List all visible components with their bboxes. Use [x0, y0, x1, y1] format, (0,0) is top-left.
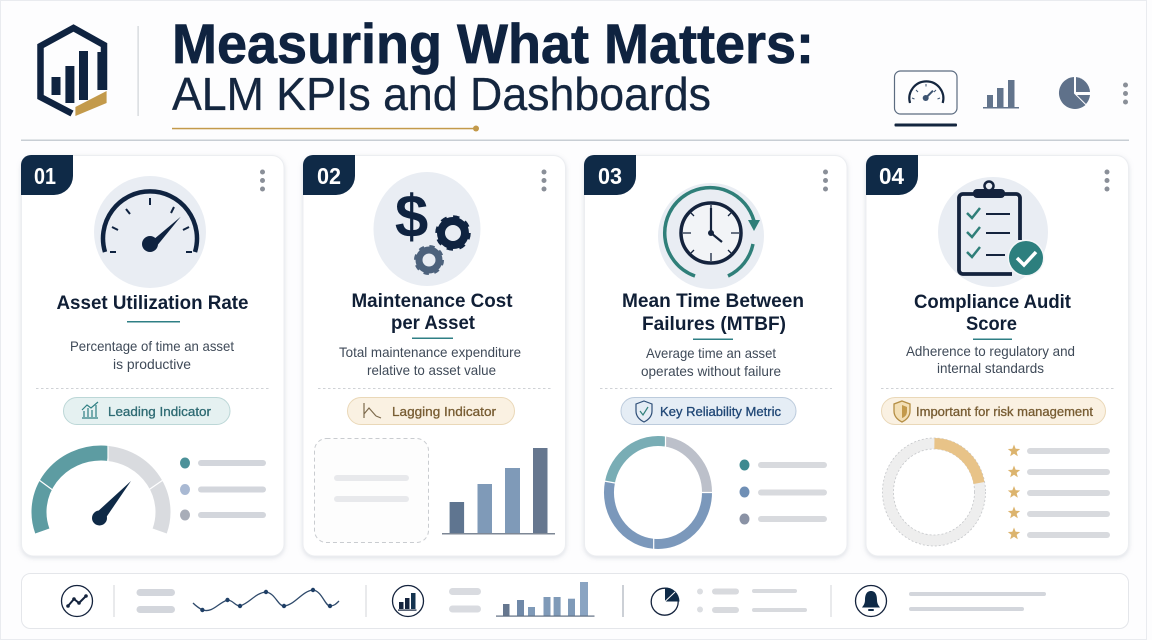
number badge 01	[21, 155, 73, 195]
chart: gauge	[39, 444, 163, 531]
heading: per Asset	[391, 312, 475, 334]
panel: card 01 asset utilization rate	[21, 155, 284, 556]
chart: score donut	[882, 438, 986, 546]
number badge 02: 02	[317, 163, 341, 189]
tag: key reliability metric: Key Reliability Metric	[660, 404, 781, 419]
description	[641, 345, 781, 379]
heading: Asset Utilization Rate	[56, 292, 249, 314]
gold title underline	[172, 126, 479, 132]
description	[339, 344, 521, 378]
number badge 03: 03	[598, 163, 622, 189]
description: is productive	[113, 356, 191, 372]
more menu	[1104, 170, 1110, 192]
chart: donut	[604, 436, 713, 550]
heading	[914, 291, 1071, 335]
heading: Compliance Audit	[914, 291, 1071, 313]
placeholder box	[314, 438, 428, 542]
description: operates without failure	[641, 363, 781, 379]
tag: key reliability metric	[621, 398, 796, 424]
icon: bell	[856, 586, 886, 616]
chart legend	[740, 460, 827, 524]
description: Total maintenance expenditure	[339, 344, 521, 360]
header logo	[40, 28, 107, 116]
description: Average time an asset	[646, 345, 776, 361]
tag: leading indicator	[64, 398, 230, 424]
number badge 03	[584, 155, 636, 195]
icon: dollar and gears: $	[395, 183, 428, 250]
panel: card 03 mean time between failures	[584, 155, 847, 556]
panel: card 04 compliance audit score	[866, 155, 1128, 556]
view switch: gauge icon selected	[894, 71, 957, 126]
heading	[352, 290, 513, 334]
chart legend	[180, 458, 266, 520]
mini bar chart	[496, 582, 594, 617]
description: Percentage of time an asset	[70, 338, 234, 354]
view switch: more menu	[1123, 82, 1128, 104]
heading: Mean Time Between	[622, 290, 804, 312]
panel: bottom summary strip	[22, 574, 1128, 628]
number badge 04	[866, 155, 918, 195]
heading: Maintenance Cost	[352, 290, 513, 312]
number badge 01: 01	[34, 163, 56, 189]
description: relative to asset value	[367, 362, 496, 378]
number badge 04: 04	[879, 163, 904, 189]
tag: important for risk management: Important for risk management	[916, 404, 1093, 419]
placeholder text lines	[909, 592, 1046, 611]
icon: bar chart	[392, 586, 424, 616]
more menu	[823, 170, 828, 192]
more menu	[542, 170, 546, 192]
sparkline	[193, 588, 339, 612]
view switch: pie chart icon	[1059, 77, 1090, 109]
title: Measuring What Matters:	[172, 12, 814, 75]
description: Adherence to regulatory and	[906, 343, 1075, 359]
icon: pie chart	[651, 587, 680, 615]
placeholder legend	[697, 588, 807, 613]
tag: lagging indicator	[348, 398, 514, 424]
description	[906, 343, 1075, 376]
icon: dollar and gears	[374, 172, 480, 286]
tag: lagging indicator: Lagging Indicator	[392, 404, 497, 419]
panel: card 02 maintenance cost per asset	[303, 155, 566, 556]
view switch: bar chart icon	[983, 80, 1019, 108]
chart: bars	[442, 448, 555, 534]
more menu	[260, 170, 265, 192]
title: ALM KPIs and Dashboards	[172, 68, 711, 120]
icon: clipboard with check	[938, 177, 1048, 287]
icon: trend line	[62, 586, 92, 616]
title	[172, 12, 814, 120]
description: internal standards	[937, 360, 1044, 376]
star rating list	[1008, 444, 1110, 539]
placeholder labels	[136, 589, 175, 613]
icon: clock with cycle arrows	[658, 183, 764, 289]
heading: Score	[966, 313, 1017, 335]
heading: Failures (MTBF)	[642, 313, 786, 335]
number badge 02	[303, 155, 355, 195]
tag: leading indicator: Leading Indicator	[108, 404, 212, 419]
icon: speedometer	[94, 176, 206, 288]
heading	[622, 290, 804, 335]
placeholder labels	[449, 588, 481, 612]
tag: important for risk management	[882, 398, 1106, 424]
description	[70, 338, 234, 372]
